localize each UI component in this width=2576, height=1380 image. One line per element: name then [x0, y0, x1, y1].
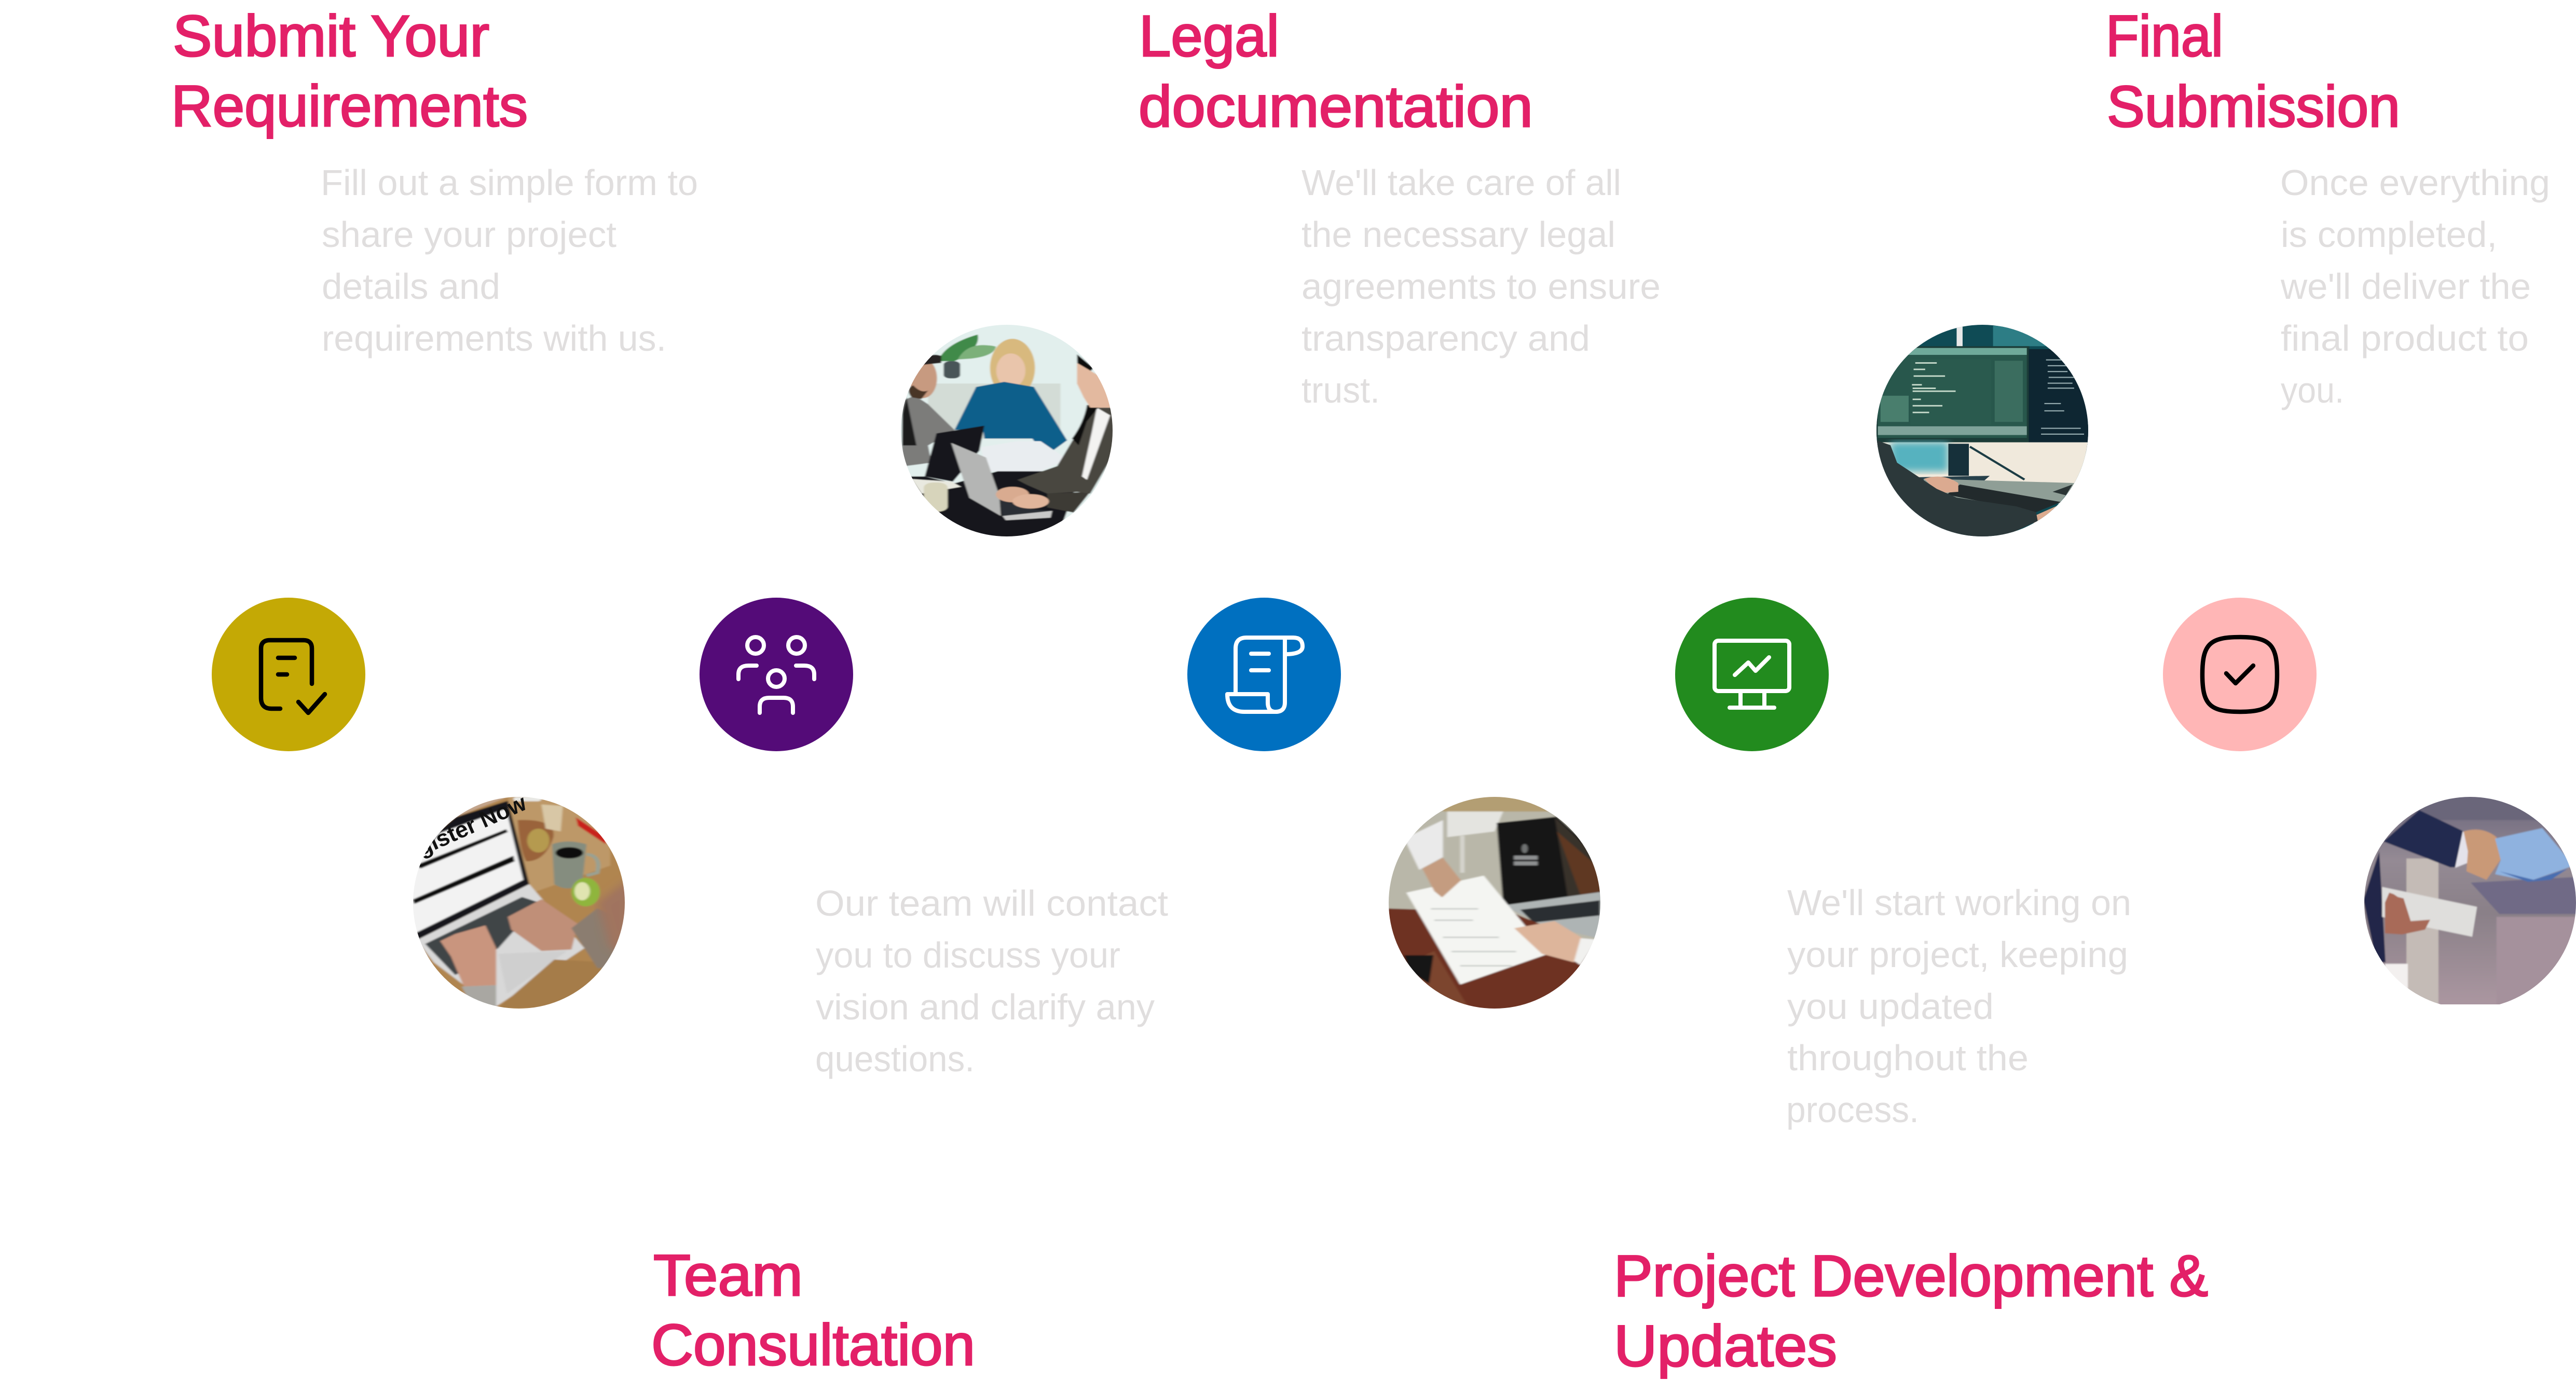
step 2 heading: Consultation	[651, 1313, 975, 1377]
photo: employment agreement handover	[1389, 797, 1600, 1009]
step 2 text: Our team will contact	[815, 883, 1168, 923]
step 2 heading: Team	[653, 1243, 803, 1308]
step 1 text: Fill out a simple form to	[321, 162, 698, 203]
step 5 text: you.	[2281, 370, 2344, 410]
icon: blue scroll document	[1187, 598, 1341, 751]
step 1 heading: Requirements	[171, 74, 528, 139]
step 5 text: is completed,	[2281, 214, 2497, 255]
photo: developer at monitors	[1874, 323, 2092, 544]
step 1 heading	[171, 4, 528, 139]
step 1 text	[321, 162, 698, 358]
step 5 heading	[2106, 4, 2400, 139]
step 4 text: We'll start working on	[1787, 882, 2131, 923]
step 4 heading	[1614, 1244, 2208, 1378]
step 5 text: final product to	[2281, 318, 2529, 358]
step 2 text	[815, 883, 1168, 1079]
step 3 heading: Legal	[1139, 4, 1279, 68]
step 3 text: agreements to ensure	[1301, 266, 1661, 307]
step 4 text: you updated	[1787, 986, 1994, 1027]
step 3 text: trust.	[1301, 370, 1380, 410]
icon: yellow form check	[212, 598, 365, 751]
step 4 text: throughout the	[1787, 1038, 2029, 1078]
photo: register form on laptop: gister Now	[413, 790, 530, 861]
step 2 text: questions.	[815, 1039, 975, 1079]
photo: register form on laptop	[408, 790, 632, 1012]
step 4 text: process.	[1786, 1089, 1919, 1130]
step 4 heading: Project Development &	[1614, 1244, 2208, 1308]
step 5 text: Once everything	[2280, 162, 2550, 203]
photo: team meeting	[898, 323, 1117, 539]
icon: green monitor chart	[1675, 598, 1829, 751]
step 1 text: share your project	[322, 214, 616, 255]
step 5 text	[2280, 162, 2550, 410]
step 4 text	[1786, 882, 2131, 1130]
step 5 heading: Final	[2106, 4, 2223, 68]
step 3 text: transparency and	[1301, 318, 1590, 358]
step 5 heading: Submission	[2107, 74, 2400, 139]
step 3 text: We'll take care of all	[1301, 162, 1621, 203]
icon: pink check badge	[2163, 598, 2317, 751]
step 1 text: requirements with us.	[322, 318, 666, 358]
icon: purple team	[700, 598, 853, 751]
step 2 heading	[651, 1243, 975, 1377]
step 3 text: the necessary legal	[1301, 214, 1615, 255]
step 1 heading: Submit Your	[173, 4, 489, 68]
step 3 text	[1301, 162, 1661, 410]
step 4 heading: Updates	[1614, 1314, 1837, 1378]
step 4 text: your project, keeping	[1787, 934, 2128, 975]
photo: handshake	[2362, 794, 2576, 1011]
step 1 text: details and	[322, 266, 500, 307]
step 2 text: you to discuss your	[816, 935, 1120, 975]
step 5 text: we'll deliver the	[2280, 266, 2531, 307]
step 3 heading	[1139, 4, 1533, 139]
step 3 heading: documentation	[1139, 74, 1533, 139]
step 2 text: vision and clarify any	[816, 987, 1155, 1027]
